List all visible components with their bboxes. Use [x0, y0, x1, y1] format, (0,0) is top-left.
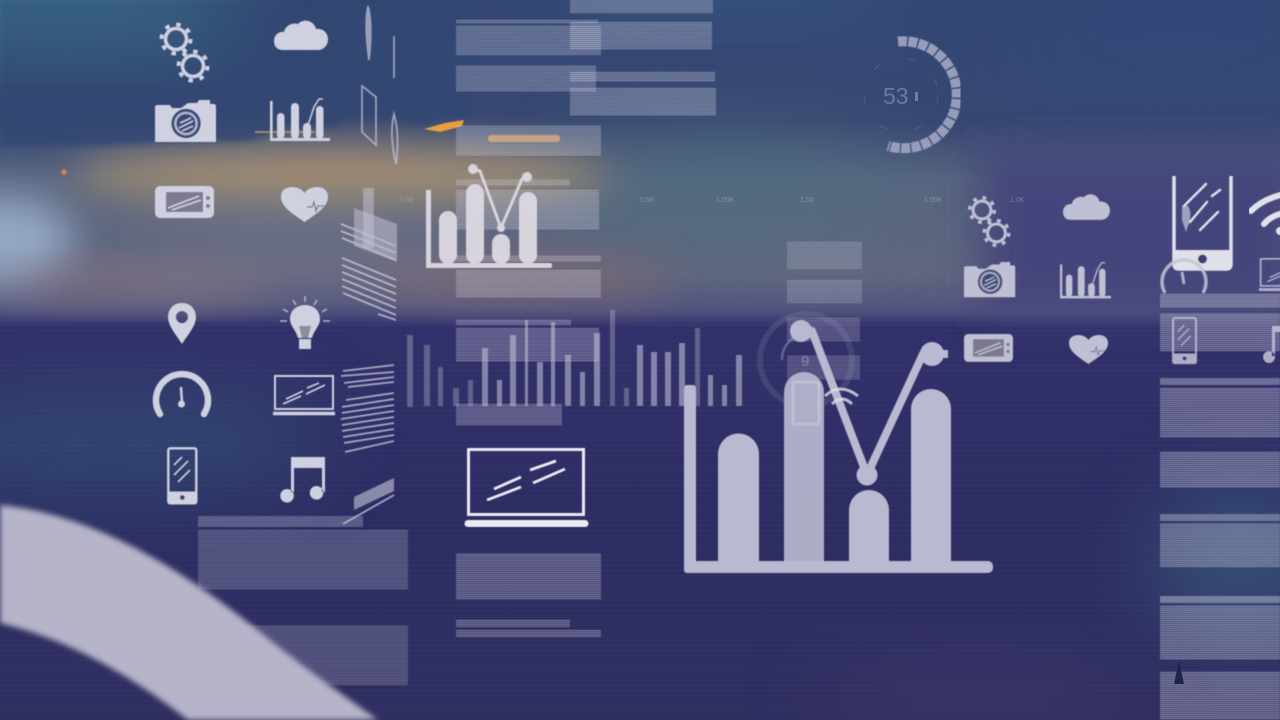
- text panel: lower left: [198, 516, 408, 685]
- icon: music note: [280, 457, 325, 503]
- text column: small centre block: [787, 242, 862, 380]
- icon: gears: [970, 198, 1009, 245]
- icon: laptop: [1259, 259, 1280, 290]
- icon: camera: [155, 100, 216, 142]
- icon: wifi: [1251, 193, 1280, 235]
- ring dial behind large chart: [760, 314, 852, 406]
- sunset highlights on the cloud: [61, 120, 560, 175]
- axis value labels row: [400, 197, 1025, 204]
- icon: camera: [964, 262, 1015, 297]
- medium laptop: [468, 450, 585, 524]
- icon: heart: [1069, 335, 1108, 364]
- icon: cloud: [1063, 194, 1110, 220]
- icon grid: right: [964, 194, 1111, 364]
- edge-on rotating icons: [362, 6, 412, 406]
- icon: game pad: [964, 334, 1013, 362]
- icon: light bulb: [280, 296, 330, 349]
- icon: laptop: [273, 376, 335, 414]
- icon: gears: [162, 24, 208, 80]
- large arc foreground: [0, 505, 378, 720]
- icon: bar chart small: [1060, 263, 1111, 298]
- boat silhouette: [1174, 660, 1184, 684]
- radial gauge: 53 percent: [864, 41, 957, 148]
- gauge value: 53: [883, 83, 909, 109]
- icon: phone: [168, 448, 196, 503]
- axis value labels row: 1.00: [800, 197, 814, 204]
- wifi icon over large chart: [793, 382, 858, 424]
- icon: game pad: [155, 186, 214, 218]
- skewed text lines beside icons: [341, 208, 397, 524]
- ring dial behind large chart: 9: [801, 353, 809, 370]
- right column small icons: [1162, 259, 1280, 363]
- axis value labels row: 1.00K: [924, 197, 943, 204]
- icon: heart: [281, 187, 328, 222]
- icon: speed gauge: [156, 374, 208, 414]
- axis value labels row: 1.00: [400, 197, 414, 204]
- icon: location pin: [168, 303, 196, 344]
- medium bar chart: [426, 164, 552, 268]
- axis value labels row: 1.0K: [1010, 197, 1025, 204]
- icon: bar chart small: [270, 99, 330, 141]
- text column: centre: [456, 20, 601, 637]
- icon: music note: [1263, 326, 1280, 363]
- icon grid: left: [155, 21, 335, 503]
- text panel: right: [1160, 294, 1280, 720]
- large bar chart: [684, 320, 993, 573]
- axis value labels row: 1.00K: [716, 197, 735, 204]
- axis value labels row: 0.5K: [640, 197, 655, 204]
- icon: speed gauge: [1162, 260, 1206, 293]
- bar chart: background equaliser bars: [424, 310, 742, 406]
- icon: cloud: [274, 21, 328, 50]
- icon: phone: [1173, 318, 1196, 363]
- large icon: phone: [1174, 176, 1231, 269]
- text column: upper centre right: [570, 0, 716, 116]
- icon: gauge needle: [1182, 272, 1184, 284]
